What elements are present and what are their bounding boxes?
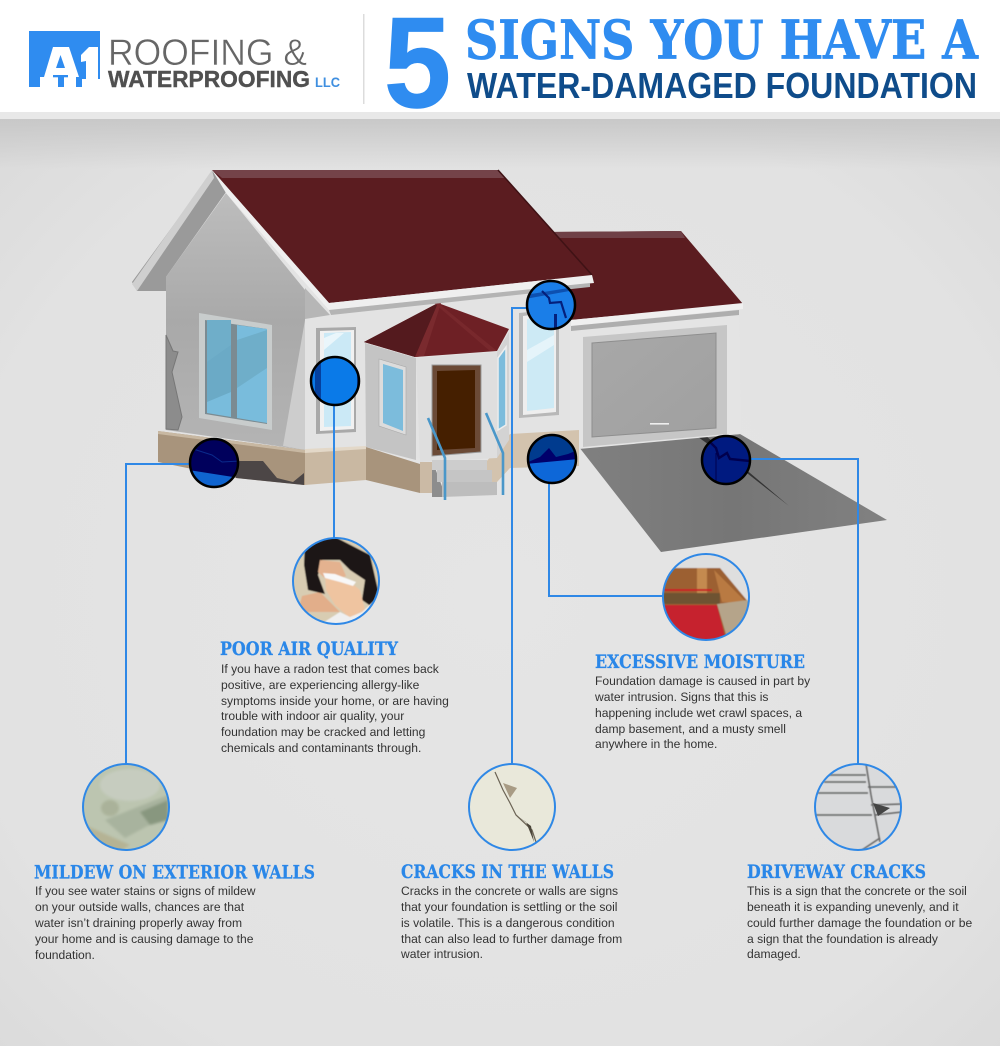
- photo: wet crawl space: [662, 553, 750, 641]
- body text: anywhere in the home.: [595, 737, 717, 751]
- body text: damaged.: [747, 947, 801, 961]
- heading: POOR AIR QUALITY: [220, 639, 399, 660]
- section: driveway cracks: [747, 862, 973, 961]
- photo: mildew wall: [82, 763, 170, 851]
- body text: chemicals and contaminants through.: [221, 741, 421, 755]
- body text: could further damage the foundation or be: [747, 916, 973, 930]
- photo: cracked wall: [468, 763, 556, 851]
- stair rails: [428, 413, 503, 500]
- marker: wall crack: [525, 279, 577, 331]
- body text: positive, are experiencing allergy-like: [221, 678, 420, 692]
- body text: water intrusion.: [400, 947, 483, 961]
- main roof: [212, 170, 592, 303]
- section: excessive moisture: [594, 652, 811, 751]
- heading: EXCESSIVE MOISTURE: [595, 652, 805, 673]
- body text: your home and is causing damage to the: [35, 932, 254, 946]
- logo text: waterproofing: WATERPROOFING: [108, 66, 310, 92]
- heading: DRIVEWAY CRACKS: [747, 862, 926, 883]
- body text: trouble with indoor air quality, your: [221, 709, 404, 723]
- body text: damp basement, and a musty smell: [595, 722, 786, 736]
- section: cracks in the walls: [400, 862, 622, 961]
- logo text: roofing: ROOFING &: [108, 32, 307, 73]
- logo: [29, 31, 340, 92]
- body text: on your outside walls, chances are that: [35, 900, 245, 914]
- wall crack: [166, 335, 182, 430]
- garage section: [540, 231, 743, 450]
- right window: [519, 309, 559, 418]
- gable corner shade: [305, 288, 330, 319]
- body text: a sign that the foundation is already: [747, 932, 939, 946]
- marker: moisture: [526, 433, 578, 485]
- illustration: house: [132, 170, 887, 552]
- front wall: [304, 290, 570, 462]
- body text: water isn’t draining properly away from: [34, 916, 242, 930]
- porch right window: [498, 347, 506, 430]
- photo: cracked driveway: [814, 763, 902, 851]
- logo mark: A1: [29, 31, 100, 87]
- foundation: [158, 431, 433, 493]
- section: poor air quality: [220, 639, 449, 755]
- leader lines: [126, 308, 858, 765]
- photo: woman sneezing: [292, 537, 380, 626]
- corner highlight: [283, 320, 305, 450]
- body text: If you have a radon test that comes back: [221, 662, 440, 676]
- roof fascia: [212, 170, 594, 315]
- porch left window: [379, 359, 406, 435]
- body text: that can also lead to further damage from: [401, 932, 622, 946]
- front door: [432, 365, 481, 456]
- body text: If you see water stains or signs of mildew: [35, 884, 256, 898]
- foundation damage: [232, 461, 304, 485]
- body text: foundation.: [35, 948, 95, 962]
- left side overhang: [132, 171, 226, 291]
- centre window: [316, 327, 356, 434]
- marker: driveway: [700, 434, 752, 486]
- body text: [34, 884, 256, 962]
- body text: [594, 674, 811, 751]
- porch walls: [365, 332, 509, 462]
- body text: [221, 662, 449, 755]
- body text: Foundation damage is caused in part by: [595, 674, 811, 688]
- body text: [747, 884, 973, 961]
- left overhang edge: [132, 170, 214, 291]
- header bar: [0, 0, 1000, 119]
- body text: is volatile. This is a dangerous condition: [401, 916, 615, 930]
- porch roof: [364, 303, 509, 357]
- marker: foundation damage: [188, 437, 240, 490]
- heading: MILDEW ON EXTERIOR WALLS: [34, 862, 315, 884]
- body text: Cracks in the concrete or walls are signs: [401, 884, 618, 898]
- body text: that your foundation is settling or the soil: [401, 900, 617, 914]
- body text: beneath it is expanding unevenly, and it: [747, 900, 959, 914]
- heading: CRACKS IN THE WALLS: [401, 862, 614, 883]
- side window: [199, 313, 272, 430]
- steps: [432, 460, 497, 497]
- driveway: [579, 434, 887, 552]
- body text: [400, 884, 622, 961]
- body text: symptoms inside your home, or are having: [221, 694, 449, 708]
- body text: water intrusion. Signs that this is: [594, 690, 768, 704]
- section: mildew on exterior walls: [34, 862, 315, 962]
- body text: foundation may be cracked and letting: [221, 725, 425, 739]
- logo text: llc: LLC: [315, 75, 340, 90]
- side wall: [166, 193, 305, 450]
- marker: window air: [309, 355, 361, 407]
- right entry foundation: [486, 430, 579, 482]
- body text: happening include wet crawl spaces, a: [595, 706, 802, 720]
- body text: This is a sign that the concrete or the soil: [747, 884, 967, 898]
